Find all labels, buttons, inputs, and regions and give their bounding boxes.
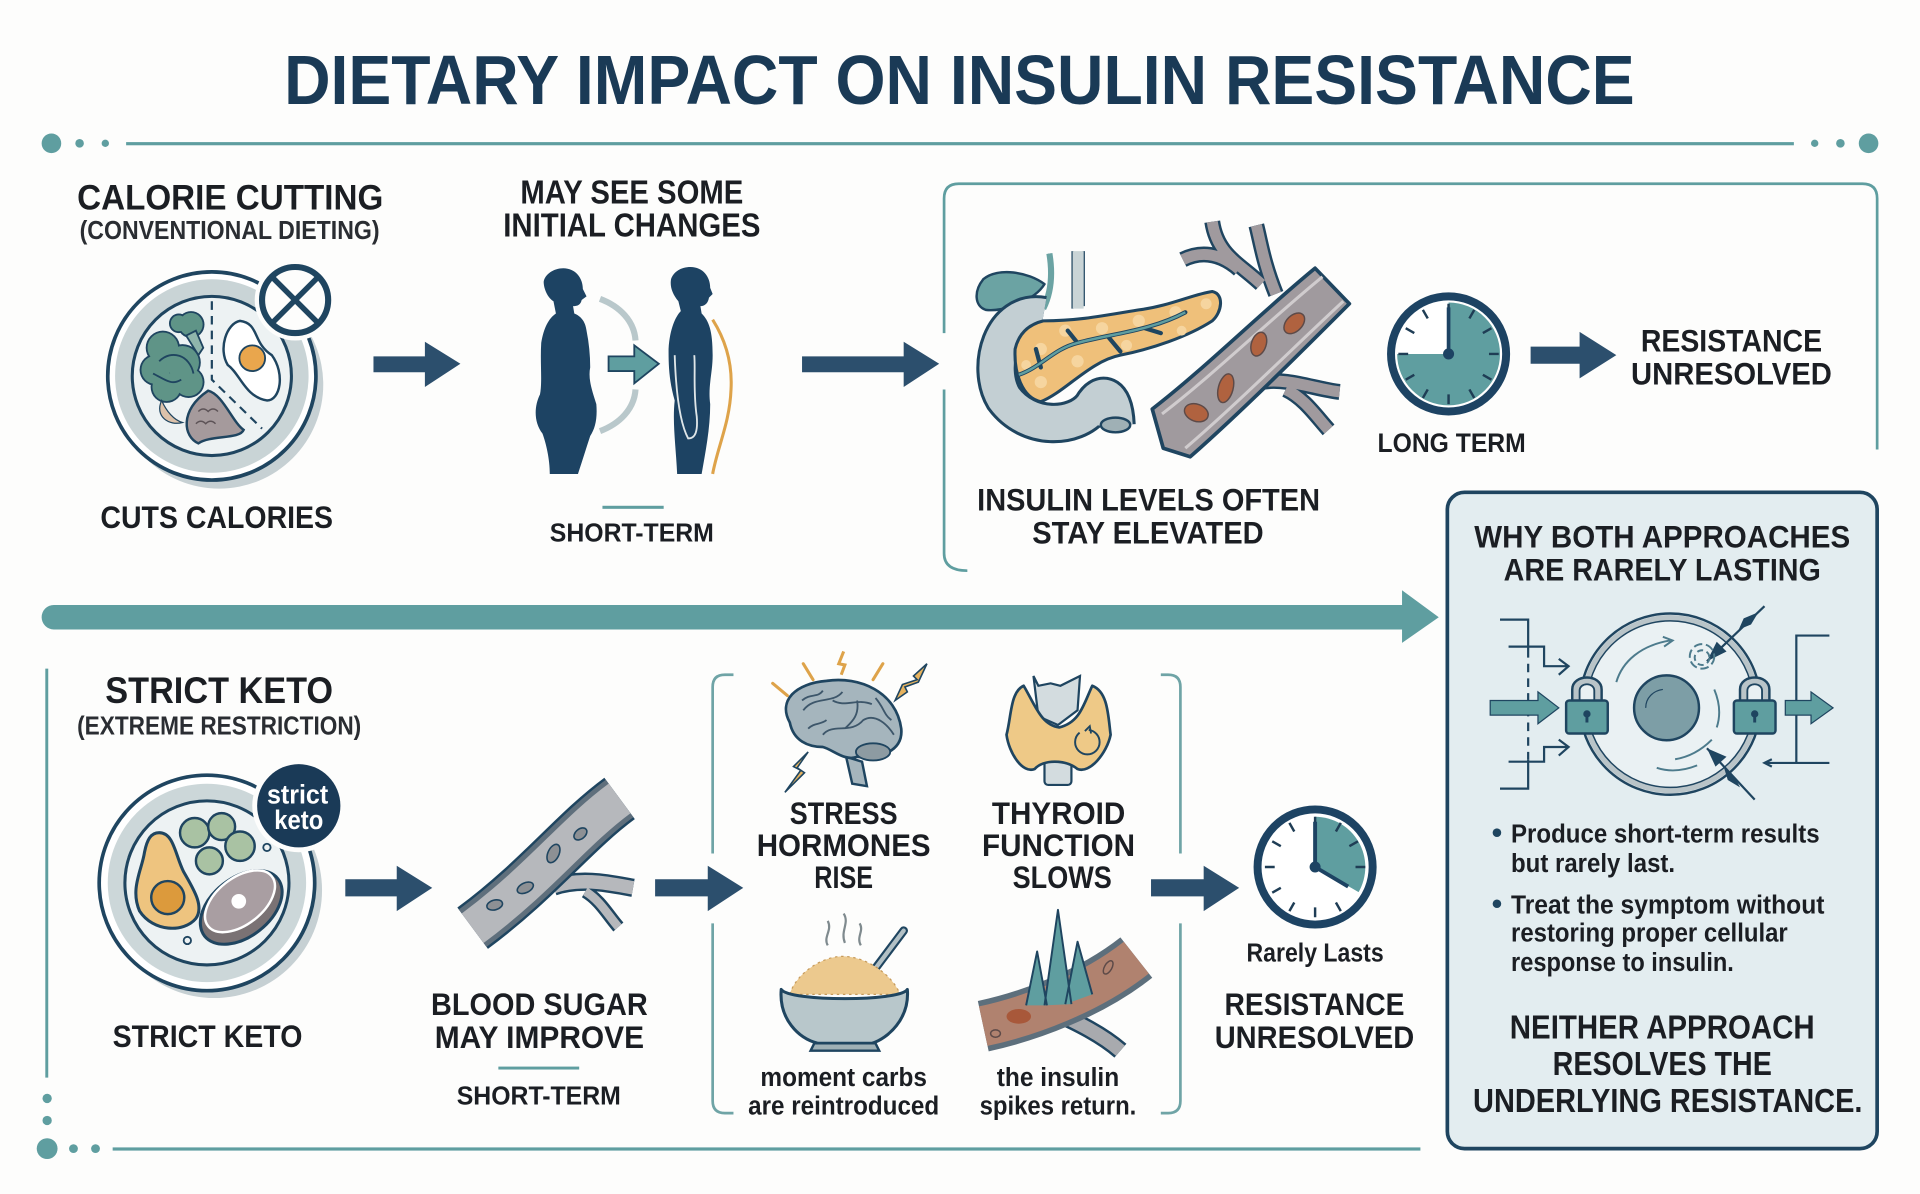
- text: insulin spikes: the insulin: [997, 1064, 1119, 1092]
- text: thyroid function slows: SLOWS: [1013, 859, 1112, 895]
- bullet list: Produce short-term results: [1511, 821, 1820, 849]
- text: insulin spikes: [980, 1064, 1136, 1120]
- text: stress hormones rise: RISE: [814, 859, 873, 895]
- header divider: [42, 134, 1878, 153]
- section frame: lower left: [37, 669, 1420, 1159]
- text: insulin levels: STAY ELEVATED: [1032, 515, 1264, 551]
- short-term label: SHORT-TERM: [457, 1083, 621, 1111]
- icon: long-term clock: [1391, 296, 1506, 411]
- text: moment carbs: are reintroduced: [748, 1092, 939, 1120]
- icon: pancreas: [977, 251, 1221, 432]
- arrow: [802, 342, 939, 387]
- keto steak: [186, 856, 296, 959]
- arrow: [373, 342, 460, 387]
- text: insulin levels: [977, 482, 1320, 551]
- text: blood sugar: BLOOD SUGAR: [431, 986, 648, 1022]
- broccoli: [140, 311, 204, 403]
- arrow: [1531, 332, 1616, 378]
- panel: strict keto heading: [77, 670, 361, 741]
- pancreas body: [1015, 291, 1221, 402]
- strict keto badge: strict: [267, 779, 328, 809]
- panel: long-term bracket: [944, 184, 1877, 571]
- arrow: [1151, 866, 1239, 911]
- strict keto badge: keto: [274, 805, 323, 835]
- avocado: [136, 833, 199, 928]
- conclusion: [1473, 1009, 1862, 1120]
- icon: carb bowl: [781, 914, 908, 1051]
- cucumbers: [180, 813, 255, 874]
- bile ducts: [1043, 251, 1084, 309]
- text: may see some initial changes: [503, 174, 760, 244]
- icon: rarely lasts clock: [1258, 809, 1373, 925]
- text: cuts calories: CUTS CALORIES: [100, 499, 333, 535]
- panel: calorie cutting heading: [77, 177, 383, 245]
- text: insulin levels: INSULIN LEVELS OFTEN: [977, 482, 1320, 518]
- panel: calorie cutting heading: CALORIE CUTTING: [77, 177, 383, 217]
- text: stress hormones rise: [757, 795, 931, 895]
- text: insulin spikes: spikes return.: [980, 1092, 1136, 1120]
- egg: [224, 321, 280, 400]
- panel heading: [1474, 518, 1850, 587]
- arrow: [345, 866, 432, 911]
- panel: strict keto heading: STRICT KETO: [105, 670, 333, 711]
- text: stress hormones rise: HORMONES: [757, 827, 931, 863]
- text: long term: LONG TERM: [1378, 428, 1526, 458]
- text: resistance unresolved: UNRESOLVED: [1631, 356, 1832, 392]
- icon: body silhouettes: [536, 267, 731, 474]
- gallbladder: [977, 272, 1044, 310]
- panel heading: ARE RARELY LASTING: [1504, 551, 1821, 587]
- text: thyroid function slows: [982, 795, 1135, 895]
- strict keto badge: [252, 759, 345, 852]
- text: moment carbs: [748, 1064, 939, 1120]
- short-term label: SHORT-TERM: [550, 519, 714, 547]
- text: may see some initial changes: MAY SEE SOME: [520, 174, 743, 211]
- icon: damaged blood vessel: [1152, 222, 1349, 457]
- text: resistance unresolved: RESISTANCE: [1641, 322, 1822, 358]
- timeline arrow: [42, 590, 1439, 643]
- icon: healthy blood vessel: [473, 798, 633, 928]
- lock right: [1734, 678, 1776, 734]
- text: moment carbs: moment carbs: [760, 1064, 927, 1092]
- text: resistance unresolved: [1631, 322, 1832, 392]
- text: thyroid function slows: FUNCTION: [982, 827, 1135, 863]
- bullet list: restoring proper cellular: [1511, 920, 1788, 948]
- text: rarely lasts: Rarely Lasts: [1247, 939, 1384, 967]
- text: resistance unresolved: [1215, 986, 1414, 1055]
- icon: keto plate: [99, 759, 345, 998]
- text: blood sugar: MAY IMPROVE: [435, 1019, 644, 1055]
- no-sign badge: [255, 260, 336, 340]
- icon: insulin spikes vessel: [983, 910, 1136, 1051]
- text: may see some initial changes: INITIAL CHANGES: [503, 207, 760, 244]
- arrow: [655, 866, 743, 911]
- text: resistance unresolved: UNRESOLVED: [1215, 1019, 1414, 1055]
- stress sparks: [773, 651, 927, 792]
- short-term label: [550, 506, 714, 547]
- panel: why both approaches: [1447, 492, 1877, 1149]
- panel: calorie cutting heading: (CONVENTIONAL DIETING): [80, 217, 380, 245]
- title: DIETARY IMPACT ON INSULIN RESISTANCE: [284, 41, 1635, 119]
- steak: [160, 391, 244, 443]
- lock left: [1566, 678, 1608, 734]
- panel: effects bracket: [713, 675, 1180, 1113]
- icon: calorie plate: [108, 260, 336, 489]
- text: strict keto: STRICT KETO: [113, 1018, 302, 1054]
- conclusion: NEITHER APPROACH: [1510, 1009, 1815, 1046]
- bullet list: response to insulin.: [1511, 949, 1734, 977]
- text: resistance unresolved: RESISTANCE: [1224, 986, 1404, 1022]
- panel: strict keto heading: (EXTREME RESTRICTION): [77, 713, 361, 741]
- bullet list: but rarely last.: [1511, 850, 1675, 878]
- icon: thyroid: [1007, 676, 1111, 785]
- text: thyroid function slows: THYROID: [992, 795, 1125, 831]
- exit arrow: [1785, 692, 1833, 724]
- bullet list: Treat the symptom without: [1511, 892, 1825, 920]
- conclusion: RESOLVES THE: [1553, 1046, 1772, 1083]
- text: stress hormones rise: STRESS: [790, 795, 898, 831]
- icon: locked cell: [1490, 606, 1833, 800]
- conclusion: UNDERLYING RESISTANCE.: [1473, 1083, 1862, 1120]
- text: blood sugar: [431, 986, 648, 1055]
- entry arrow: [1490, 692, 1559, 724]
- panel heading: WHY BOTH APPROACHES: [1474, 518, 1850, 554]
- duodenum: [997, 315, 1116, 425]
- bullet list: [1493, 821, 1825, 977]
- icon: stressed brain: [773, 651, 927, 792]
